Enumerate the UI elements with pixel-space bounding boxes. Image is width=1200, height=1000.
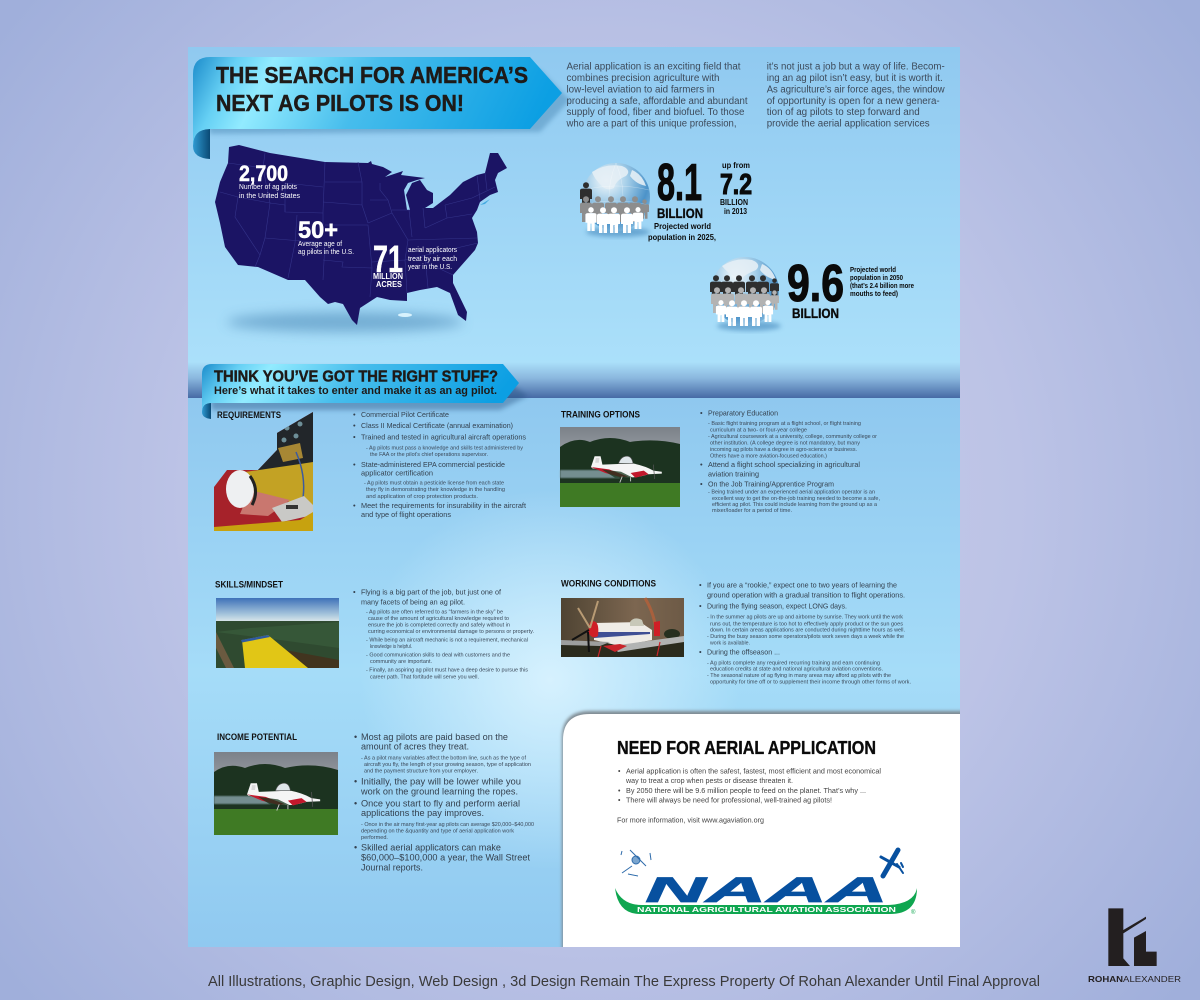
stat: up from 7.2 billion: in 2013 <box>724 206 747 216</box>
bullet list: working conditions: • <box>699 580 702 589</box>
bullet list: requirements: they fly in demonstrating their knowledge in the handling <box>366 487 505 493</box>
bullet list: training options: - Agricultural coursework at a university, college, community college or <box>708 434 877 440</box>
bullet list: training options: • <box>700 460 703 469</box>
text block: introduction column 2: it’s not just a job but a way of life. Becom- <box>767 62 945 72</box>
panel: income potential <box>214 732 534 872</box>
stat: average age: Average age of <box>298 239 342 248</box>
bullet list: training options <box>700 409 880 514</box>
bullet list: need: • <box>618 798 621 805</box>
bullet list: income: • <box>354 798 357 808</box>
bullet list: requirements: applicator certification <box>361 469 433 478</box>
bullet list: working conditions: During the offseason ... <box>707 647 780 656</box>
bullet list: skills: knowledge is helpful. <box>370 644 412 650</box>
stat: 2,700 pilots: Number of ag pilots <box>239 182 297 191</box>
section heading <box>214 368 498 397</box>
logo: NAAA: NATIONAL AGRICULTURAL AVIATION ASSOCIATION <box>637 905 896 914</box>
stat: average age: ag pilots in the U.S. <box>298 247 354 256</box>
logo: NAAA: ® <box>911 909 916 916</box>
bullet list: training options: Attend a flight school specializing in agricultural <box>708 460 860 469</box>
bullet list: income: depending on the &quantity and type of aerial application work <box>361 828 514 834</box>
stat: 9.6 billion: (that’s 2.4 billion more <box>850 283 914 290</box>
bullet list: requirements <box>353 410 527 519</box>
bullet list: training options: Preparatory Education <box>708 409 778 418</box>
bullet list: requirements: • <box>353 410 356 419</box>
bullet list: training options: efficient ag pilot. This could include learning from the ground up as a <box>712 502 878 508</box>
photo: yellow wing over farmland <box>216 598 339 668</box>
bullet list: need: way to treat a crop when pests or disease threaten it. <box>625 778 793 785</box>
stat: 9.6 billion: Projected world <box>850 267 896 274</box>
bullet list: income: Most ag pilots are paid based on the <box>361 732 508 742</box>
text block: introduction column 1: combines precision agriculture with <box>566 73 720 84</box>
bullet list: income: aircraft you fly, the length of your growing season, type of application <box>364 762 531 768</box>
stat: 8.1 billion: BILLION <box>657 205 703 221</box>
stat: 9.6 billion: mouths to feed) <box>850 291 898 298</box>
bullet list: requirements: • <box>353 421 356 430</box>
bullet list: training options: - Basic flight training program at a flight school, or flight training <box>708 421 861 427</box>
logo: Rohan Alexander <box>1088 908 1181 984</box>
icon: helicopter <box>621 850 651 876</box>
stat: up from 7.2 billion: up from <box>722 160 750 170</box>
stat: average age: 50+ <box>298 217 338 244</box>
title: THE SEARCH FOR AMERICA’S <box>216 62 528 88</box>
text block: introduction column 1: Aerial application is an exciting field that <box>566 62 741 72</box>
stat: 2,700 pilots: in the United States <box>239 191 300 200</box>
bullet list: income: and the payment structure from your employer. <box>364 769 478 775</box>
stat: up from 7.2 billion <box>720 160 752 216</box>
bullet list: training options: incoming ag pilots have a degree in agro-science or business. <box>710 447 857 453</box>
text block: introduction column 1: who are a part of this unique profession, <box>566 118 736 130</box>
bullet list: skills: - While being an aircraft mechanic is not a requirement, mechanical <box>366 638 528 644</box>
photo: spray plane over green field <box>214 752 338 835</box>
bullet list: requirements: Commercial Pilot Certificate <box>361 410 449 419</box>
bullet list: income: • <box>354 777 357 787</box>
stat: 8.1 billion: 8.1 <box>657 154 702 212</box>
bullet list: working conditions <box>699 580 911 686</box>
text block: introduction column 1: low-level aviation to aid farmers in <box>566 84 714 96</box>
text block: introduction column 2: ing an ag pilot isn’t easy, but it is worth it. <box>767 73 943 84</box>
bullet list: income: amount of acres they treat. <box>361 742 469 752</box>
bullet list: working conditions: - During the busy season some operators/pilots work seven days a week while the <box>707 634 904 640</box>
bullet list: need: • <box>618 768 621 775</box>
title: NEXT AG PILOTS IS ON! <box>216 90 464 116</box>
bullet list: working conditions: down. In certain areas applications are conducted during nighttime hours as well. <box>710 628 905 634</box>
bullet list: skills: curring economical or environmental damage to persons or property. <box>368 629 534 635</box>
panel: header ribbon <box>193 57 570 159</box>
bullet list: requirements: Class II Medical Certificate (annual examination) <box>361 421 513 430</box>
stat: 71 million acres: 71 <box>373 239 403 281</box>
bullet list: skills: career path. That fortitude will serve you well. <box>370 674 479 680</box>
bullet list: skills: - Ag pilots are often referred to as “farmers in the sky” be <box>366 610 503 616</box>
bullet list: training options: - Being trained under an experienced aerial application operator is an <box>708 489 875 495</box>
bullet list: training options: aviation training <box>708 470 759 479</box>
photo: parked plane under a rainbow <box>561 598 684 657</box>
bullet list: skills: - Finally, an aspiring ag pilot must have a deep desire to pursue this <box>366 668 528 674</box>
stat: 8.1 billion: Projected world <box>654 221 711 231</box>
bullet list: requirements: Trained and tested in agricultural aircraft operations <box>361 433 526 442</box>
panel: US map with statistics <box>215 145 507 332</box>
bullet list: working conditions: • <box>699 602 702 611</box>
photo: cockpit and helmet <box>214 412 313 531</box>
bullet list: need: • <box>618 788 621 795</box>
bullet list: income: • <box>354 843 357 853</box>
text block: introduction column 2: tion of ag pilots to step forward and <box>767 107 920 118</box>
photo: spray plane over field <box>560 427 680 507</box>
text block: introduction column 1: supply of food, fiber and biofuel. To those <box>566 107 745 118</box>
bullet list: training options: mixer/loader for a period of time. <box>712 508 792 514</box>
stat: average age <box>298 217 354 256</box>
icon: globe with people, 9.6 billion <box>710 257 781 331</box>
stat: 2,700 pilots: 2,700 <box>239 161 288 186</box>
bullet list: working conditions: - The seasonal nature of ag flying in many areas may afford ag pilots with the <box>707 673 891 679</box>
stat: 8.1 billion: population in 2025, <box>648 232 716 242</box>
bullet list: need: By 2050 there will be 9.6 million people to feed on the planet. That’s why ... <box>626 788 866 795</box>
heading: working conditions: WORKING CONDITIONS <box>561 579 656 589</box>
footer: copyright line: All Illustrations, Graphic Design, Web Design , 3d Design Remain The Express Property Of Rohan Alexander Until Final Approval <box>208 974 1040 990</box>
bullet list: working conditions: runs out, the temperature is too hot to effectively apply product or the sun goes <box>710 621 903 627</box>
bullet list: income: Once you start to fly and perform aerial <box>361 798 520 808</box>
panel: section ribbon <box>202 364 528 419</box>
stat: 8.1 billion <box>648 154 716 242</box>
heading: training options: TRAINING OPTIONS <box>561 410 640 420</box>
panel: training options <box>560 409 880 514</box>
stat: 2,700 pilots <box>239 161 300 200</box>
bullet list: skills: community are important. <box>370 659 432 665</box>
bullet list: training options: • <box>700 479 703 488</box>
bullet list: requirements: • <box>353 433 356 442</box>
bullet list: skills: • <box>353 588 356 597</box>
bullet list: income: - As a pilot many variables affect the bottom line, such as the type of <box>361 755 526 761</box>
bullet list: requirements: State-administered EPA commercial pesticide <box>361 460 505 469</box>
stat: 71 million acres: MILLION <box>373 271 403 281</box>
bullet list: requirements: and type of flight operations <box>361 510 451 519</box>
panel: main infographic board <box>188 47 960 947</box>
stat: 9.6 billion: 9.6 <box>787 255 844 313</box>
bullet list: skills: ensure the job is completed correctly and safely without in <box>368 622 510 628</box>
text block: introduction column 1 <box>566 62 748 130</box>
bullet list: training options: • <box>700 409 703 418</box>
bullet list: training options: other institution. (A college degree is not mandatory, but many <box>710 440 860 446</box>
bullet list: training options: Others have a more aviation-focused education.) <box>710 454 827 460</box>
heading: income potential: INCOME POTENTIAL <box>217 732 297 742</box>
bullet list: income: performed. <box>361 835 388 841</box>
bullet list: working conditions: During the flying season, expect LONG days. <box>707 602 847 611</box>
stat: up from 7.2 billion: 7.2 <box>720 169 752 201</box>
stat: 71 million acres <box>373 239 457 289</box>
text: more information: For more information, visit www.agaviation.org <box>617 818 764 825</box>
logo: NAAA <box>615 850 917 916</box>
bullet list: income: - Once in the air many first-year ag pilots can average $20,000–$40,000 <box>361 822 534 828</box>
panel: working conditions <box>561 579 911 686</box>
text block: introduction column 2 <box>767 62 945 130</box>
heading: need for aerial application: NEED FOR AERIAL APPLICATION <box>617 737 876 758</box>
text block: introduction column 2: As agriculture’s air force ages, the window <box>767 84 945 96</box>
section heading: Here’s what it takes to enter and make it as an ag pilot. <box>214 385 497 397</box>
bullet list: need: Aerial application is often the safest, fastest, most efficient and most economical <box>626 768 881 775</box>
bullet list: working conditions: opportunity for time off or to supplement their income through other forms of work. <box>710 680 911 686</box>
bullet list: skills: cause of the amount of agricultural knowledge required to <box>368 616 509 622</box>
icon: airplane <box>881 850 903 876</box>
panel: skills and mindset <box>215 580 534 680</box>
bullet list: training options: curriculum at a two- or four-year college <box>710 428 807 434</box>
bullet list: skills: many facets of being an ag pilot. <box>361 597 465 606</box>
bullet list: working conditions: If you are a “rookie,” expect one to two years of learning the <box>707 580 897 589</box>
bullet list: income: Journal reports. <box>361 862 423 872</box>
bullet list: income: work on the ground learning the ropes. <box>360 786 518 796</box>
bullet list: requirements: and application of crop protection products. <box>366 494 478 500</box>
bullet list: requirements: • <box>353 501 356 510</box>
logo: NAAA: NAAA <box>645 871 888 910</box>
bullet list: skills <box>353 588 534 680</box>
bullet list: need <box>618 768 881 805</box>
text block: introduction column 2: of opportunity is open for a new genera- <box>767 96 940 107</box>
bullet list: requirements: - Ag pilots must pass a knowledge and skills test administered by <box>366 446 523 452</box>
stat: 9.6 billion <box>787 255 914 321</box>
icon: globe with people, 8.1 billion <box>580 163 650 237</box>
title <box>216 62 528 116</box>
bullet list: training options: On the Job Training/Apprentice Program <box>708 479 834 488</box>
stat: 9.6 billion: BILLION <box>792 305 839 321</box>
bullet list: working conditions: - In the summer ag pilots are up and airborne by sunrise. They work until the work <box>707 615 903 621</box>
logo: Rohan Alexander: ROHAN ALEXANDER <box>1088 974 1181 984</box>
bullet list: income: Initially, the pay will be lower while you <box>361 777 521 787</box>
bullet list: working conditions: work is available. <box>709 640 750 646</box>
bullet list: working conditions: education credits at state and national agricultural aviation conventions. <box>710 667 883 673</box>
text block: introduction column 1: producing a safe, affordable and abundant <box>566 96 748 107</box>
stat: 71 million acres: treat by air each <box>408 256 457 263</box>
bullet list: income <box>354 732 534 872</box>
bullet list: requirements: Meet the requirements for insurability in the aircraft <box>361 501 527 510</box>
panel: need for aerial application <box>562 711 980 960</box>
section heading: THINK YOU’VE GOT THE RIGHT STUFF? <box>214 368 498 386</box>
stat: 9.6 billion: population in 2050 <box>850 275 903 282</box>
panel: requirements <box>214 410 527 531</box>
bullet list: requirements: - Ag pilots must obtain a pesticide license from each state <box>364 481 504 487</box>
bullet list: training options: excellent way to get the on-the-job training needed to become a safe, <box>712 496 880 502</box>
stat: 71 million acres: aerial applicators <box>408 247 457 254</box>
bullet list: working conditions: ground operation with a gradual transition to flight operations. <box>707 590 905 599</box>
bullet list: income: Skilled aerial applicators can make <box>361 843 501 853</box>
bullet list: income: • <box>354 732 357 742</box>
stat: 71 million acres: ACRES <box>376 279 402 289</box>
heading: requirements: REQUIREMENTS <box>217 410 281 420</box>
bullet list: skills: Flying is a big part of the job, but just one of <box>361 588 502 597</box>
bullet list: skills: - Good communication skills to deal with customers and the <box>366 652 510 658</box>
bullet list: need: There will always be need for professional, well-trained ag pilots! <box>626 798 832 805</box>
bullet list: income: applications the pay improves. <box>361 808 484 818</box>
bullet list: requirements: • <box>353 460 356 469</box>
stat: 71 million acres: year in the U.S. <box>408 264 452 271</box>
bullet list: requirements: the FAA or the pilot’s chief operations supervisor. <box>370 452 488 458</box>
heading: skills/mindset: SKILLS/MINDSET <box>215 580 283 590</box>
bullet list: working conditions: - Ag pilots complete any required recurring training and earn continuing <box>707 660 880 666</box>
stat: up from 7.2 billion: BILLION <box>720 197 748 207</box>
bullet list: working conditions: • <box>699 647 702 656</box>
bullet list: income: $60,000–$100,000 a year, the Wall Street <box>361 853 530 863</box>
text block: introduction column 2: provide the aerial application services <box>767 118 930 130</box>
